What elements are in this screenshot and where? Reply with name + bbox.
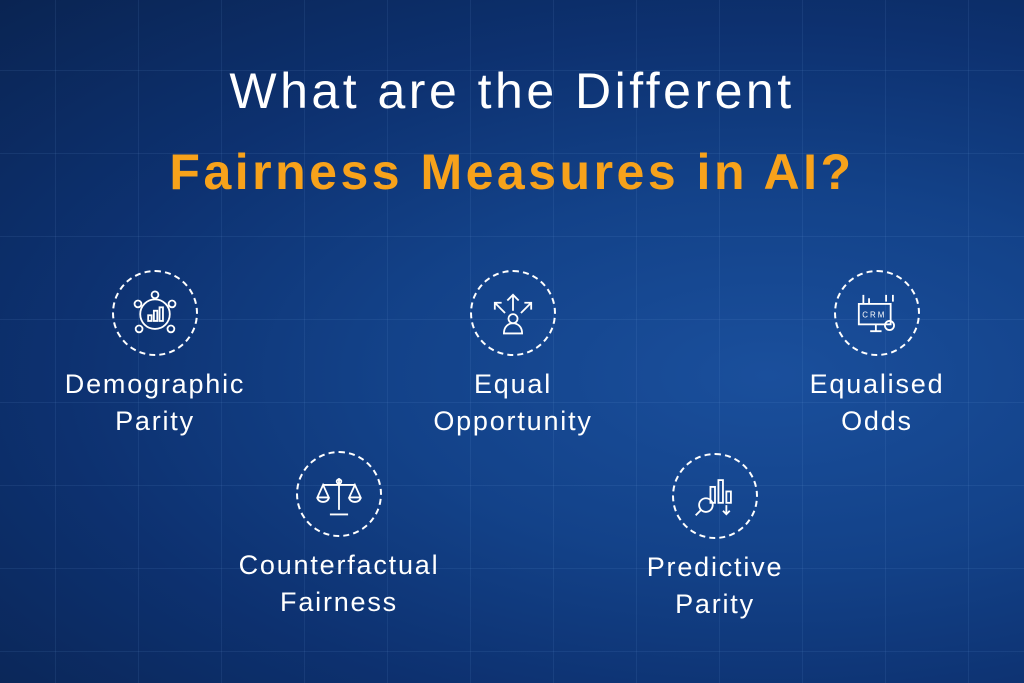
icon: scales xyxy=(296,451,382,537)
item: demographic parity xyxy=(65,270,245,436)
subtitle: Fairness Measures in AI? xyxy=(169,144,855,200)
item: equal opportunity: Opportunity xyxy=(433,406,593,436)
icon: crm monitor: CRM xyxy=(862,311,886,320)
item: counterfactual fairness xyxy=(239,451,439,617)
item: predictive parity: Parity xyxy=(675,589,755,619)
item: demographic parity: Demographic xyxy=(65,369,245,399)
icon: people chart xyxy=(112,270,198,356)
item: predictive parity: Predictive xyxy=(647,552,783,582)
item: predictive parity xyxy=(647,453,783,619)
item: counterfactual fairness: Counterfactual xyxy=(239,550,439,580)
item: demographic parity: Parity xyxy=(115,406,195,436)
item: equal opportunity: Equal xyxy=(474,369,552,399)
item: equalised odds: Odds xyxy=(841,406,913,436)
item: equal opportunity xyxy=(433,270,593,436)
item: equalised odds: Equalised xyxy=(810,369,944,399)
icon: arrows person xyxy=(470,270,556,356)
title: What are the Different xyxy=(229,63,795,119)
icon: crm monitor xyxy=(834,270,920,356)
item: equalised odds xyxy=(810,270,944,436)
item: counterfactual fairness: Fairness xyxy=(280,587,398,617)
icon: magnifier chart xyxy=(672,453,758,539)
